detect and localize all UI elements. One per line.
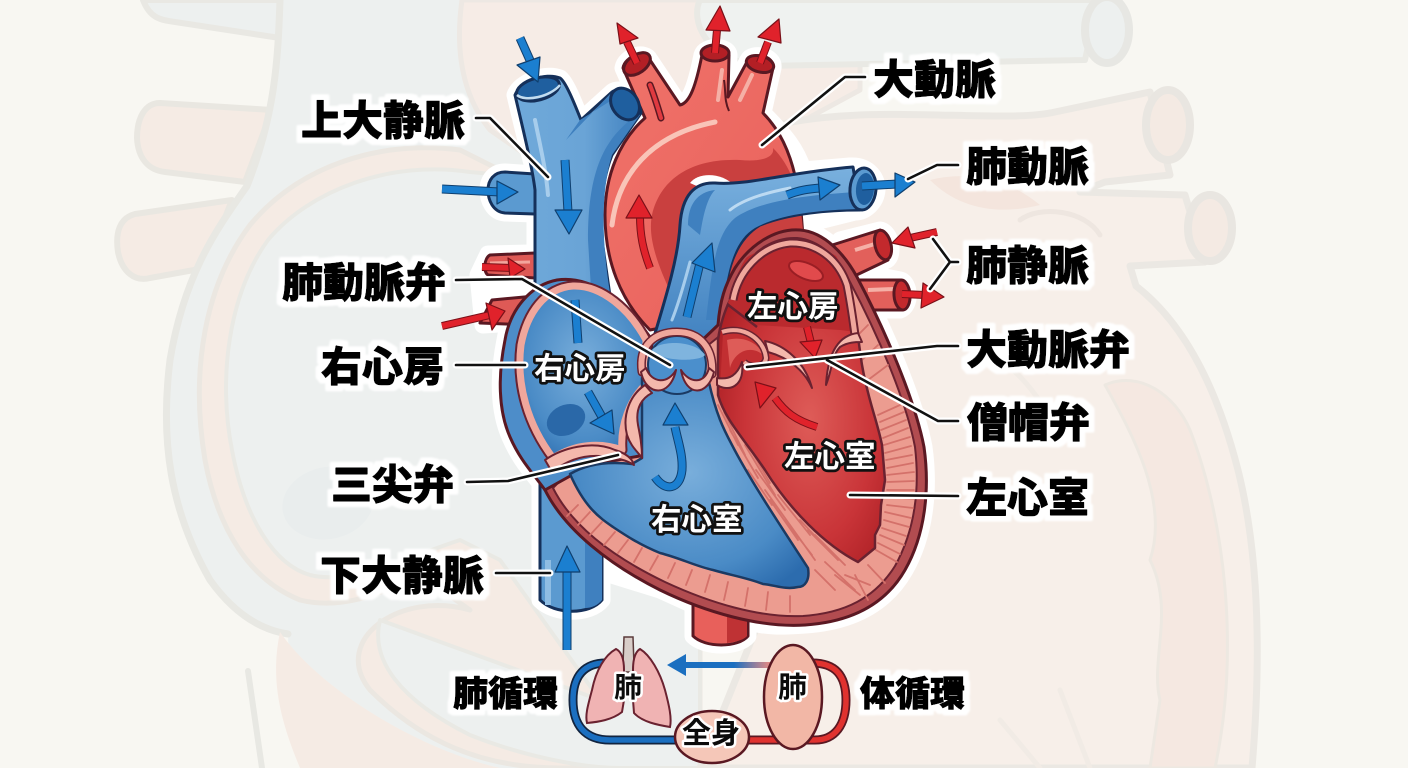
myocardium striations (567, 325, 914, 612)
circulation loop: pulmonary side (573, 663, 680, 740)
vessel: superior vena cava (488, 73, 645, 310)
heart body: outer wall (545, 230, 926, 625)
icon: right oval (lungs): 肺 (778, 672, 807, 704)
icon: whole body oval: 全身 (682, 717, 740, 750)
tricuspid valve leaflets (545, 385, 652, 472)
label: pulmonary circulation: 肺循環 (453, 675, 558, 714)
inner chamber label: left atrium: 左心房 (747, 290, 838, 324)
label: aortic valve: 大動脈弁 (966, 327, 1130, 373)
white halo around heart (478, 48, 926, 645)
vessel: aorta (605, 45, 803, 330)
vessels: right pulmonary veins (810, 229, 911, 311)
label: left ventricle: 左心室 (966, 475, 1089, 521)
icon: lungs: 肺 (614, 672, 642, 703)
circulation diagram (453, 637, 965, 763)
right atrium outer wall and cavity (500, 279, 652, 490)
inner chamber label: right atrium: 右心房 (534, 352, 626, 386)
arrow: systemic to lungs (680, 662, 770, 668)
label: pulmonary valve: 肺動脈弁 (282, 260, 446, 306)
label: mitral valve: 僧帽弁 (967, 400, 1090, 446)
label: right atrium: 右心房 (321, 344, 444, 390)
label: tricuspid valve: 三尖弁 (331, 462, 454, 508)
aortic valve (717, 330, 767, 390)
label: inferior vena cava: 下大静脈 (320, 553, 484, 599)
vessels: left pulmonary veins (480, 253, 535, 325)
mitral valve leaflets (765, 333, 862, 388)
right ventricle cavity (570, 378, 808, 588)
label: pulmonary artery: 肺動脈 (966, 144, 1089, 190)
icon: whole body oval (675, 711, 749, 763)
inner chamber label: left ventricle: 左心室 (784, 440, 876, 474)
left atrium and left ventricle cavity (718, 243, 885, 562)
vessel: pulmonary artery (650, 167, 878, 350)
icon: lungs (586, 637, 671, 727)
pulmonary valve (641, 332, 714, 394)
vessel: inferior vena cava (540, 470, 602, 611)
circulation loop: systemic side (745, 663, 846, 740)
label: pulmonary vein: 肺静脈 (966, 243, 1089, 289)
blue flow arrows (442, 38, 915, 650)
inner chamber label: right ventricle: 右心室 (651, 503, 742, 537)
red flow arrows (442, 6, 944, 427)
vessel: lower aorta stub (693, 600, 748, 645)
label: aorta: 大動脈 (873, 57, 996, 103)
label: systemic circulation: 体循環 (860, 675, 965, 714)
icon: right oval (lungs) (764, 645, 822, 749)
leader lines (456, 77, 958, 573)
label: superior vena cava: 上大静脈 (301, 98, 465, 144)
